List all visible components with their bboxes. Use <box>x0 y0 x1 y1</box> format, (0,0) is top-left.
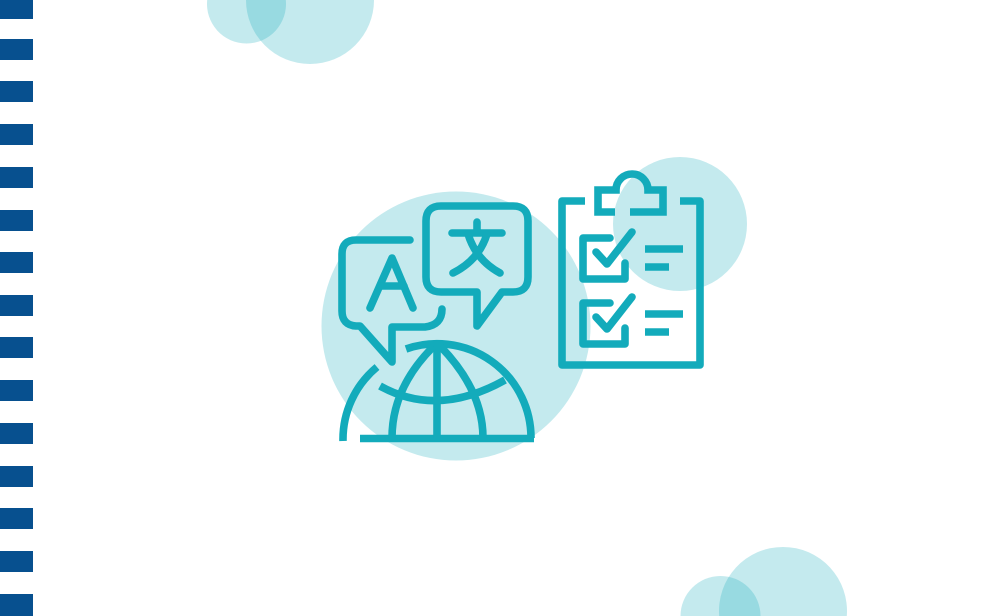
checklist item 1 <box>583 232 683 279</box>
icon: clipboard checklist <box>562 174 700 365</box>
large circle behind translation icon <box>322 192 590 460</box>
bottom circles <box>680 547 847 616</box>
icon: left speech bubble with letter A <box>342 240 442 362</box>
clipboard clip <box>598 174 663 212</box>
icon: language translation with globe <box>342 206 534 441</box>
clipboard outline <box>562 201 700 365</box>
checklist item 2 <box>583 297 683 344</box>
left striped edge band <box>0 0 33 616</box>
top circles <box>207 0 374 64</box>
icon: right speech bubble with character <box>426 206 528 326</box>
circle behind clipboard icon <box>613 157 747 291</box>
icon: globe <box>343 344 534 441</box>
